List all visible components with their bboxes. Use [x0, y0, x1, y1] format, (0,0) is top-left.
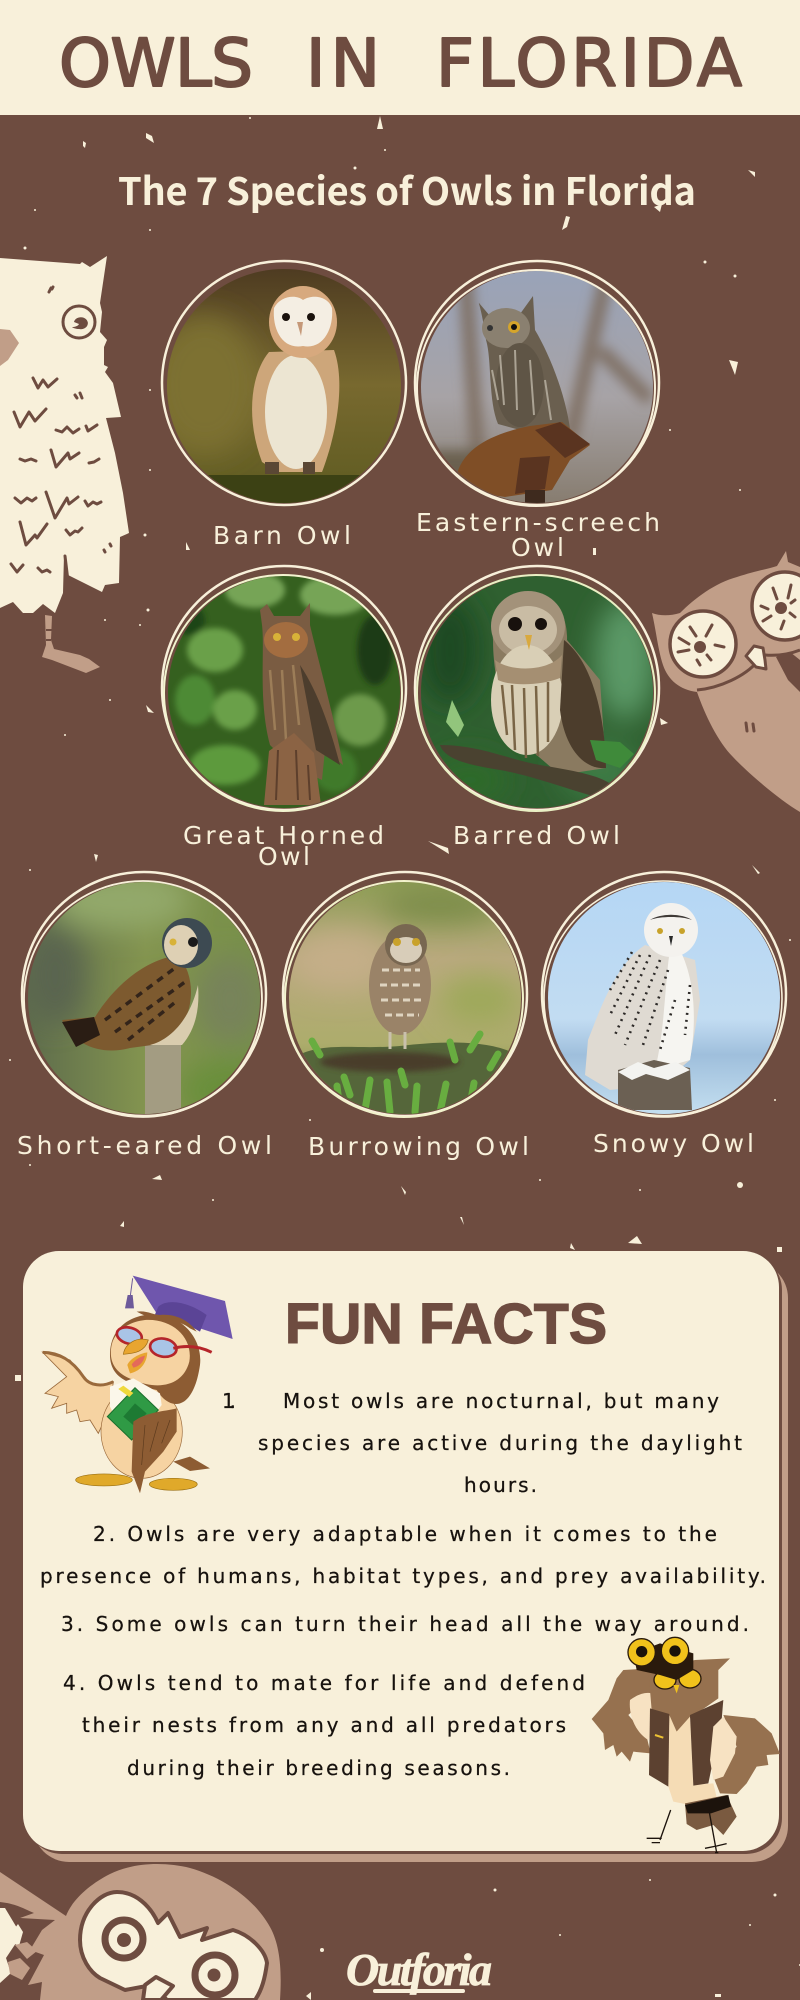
species labels: [17, 508, 754, 1161]
species labels: Great Horned: [183, 821, 384, 850]
species labels: Burrowing Owl: [308, 1132, 529, 1161]
title banner: [0, 0, 800, 115]
species labels: Barn Owl: [213, 521, 351, 550]
decorative owl right: [652, 551, 800, 812]
owl photo: short-eared owl: [20, 870, 280, 1120]
owl photo: barred owl: [415, 565, 665, 815]
decorative owl left: [0, 256, 129, 673]
species labels: Owl: [511, 533, 564, 562]
facts text: Most owls are nocturnal, but many: [283, 1389, 719, 1413]
facts text: presence of humans, habitat types, and prey availability.: [40, 1564, 766, 1588]
panel: fun facts: [23, 1251, 788, 1862]
species labels: Owl: [258, 842, 310, 871]
owl photo: snowy owl: [540, 872, 790, 1117]
owl photo: great horned owl: [160, 565, 410, 815]
owl photo: barn owl: [150, 260, 410, 515]
facts text: 4. Owls tend to mate for life and defend: [63, 1671, 585, 1695]
decorative owl bottom: [0, 1864, 281, 2000]
species labels: Eastern-screech: [416, 508, 660, 537]
facts text: 1.: [222, 1389, 236, 1413]
facts text: their nests from any and all predators: [82, 1713, 566, 1737]
title: IN: [306, 25, 380, 102]
icon: professor owl: [43, 1276, 233, 1493]
facts text: species are active during the daylight: [258, 1431, 742, 1455]
facts text: 3. Some owls can turn their head all the way around.: [61, 1612, 749, 1636]
species labels: Barred Owl: [453, 821, 620, 850]
owl photo: burrowing owl: [280, 872, 530, 1117]
heading: species: The 7 Species of Owls in Florida: [118, 161, 696, 216]
logo: Outforia: Outforia: [346, 1944, 492, 1995]
owl photo: eastern screech owl: [415, 260, 665, 515]
species labels: Short-eared Owl: [17, 1131, 272, 1160]
heading: fun facts: FUN FACTS: [285, 1292, 607, 1356]
facts text: 2. Owls are very adaptable when it comes to the: [93, 1522, 717, 1546]
facts text: during their breeding seasons.: [127, 1756, 510, 1780]
facts text: hours.: [464, 1473, 537, 1497]
title: [59, 25, 742, 102]
icon: owl with binoculars: [592, 1637, 780, 1853]
title: FLORIDA: [436, 25, 742, 102]
species labels: Snowy Owl: [593, 1129, 754, 1158]
title: OWLS: [59, 25, 253, 102]
facts text: [40, 1389, 766, 1780]
